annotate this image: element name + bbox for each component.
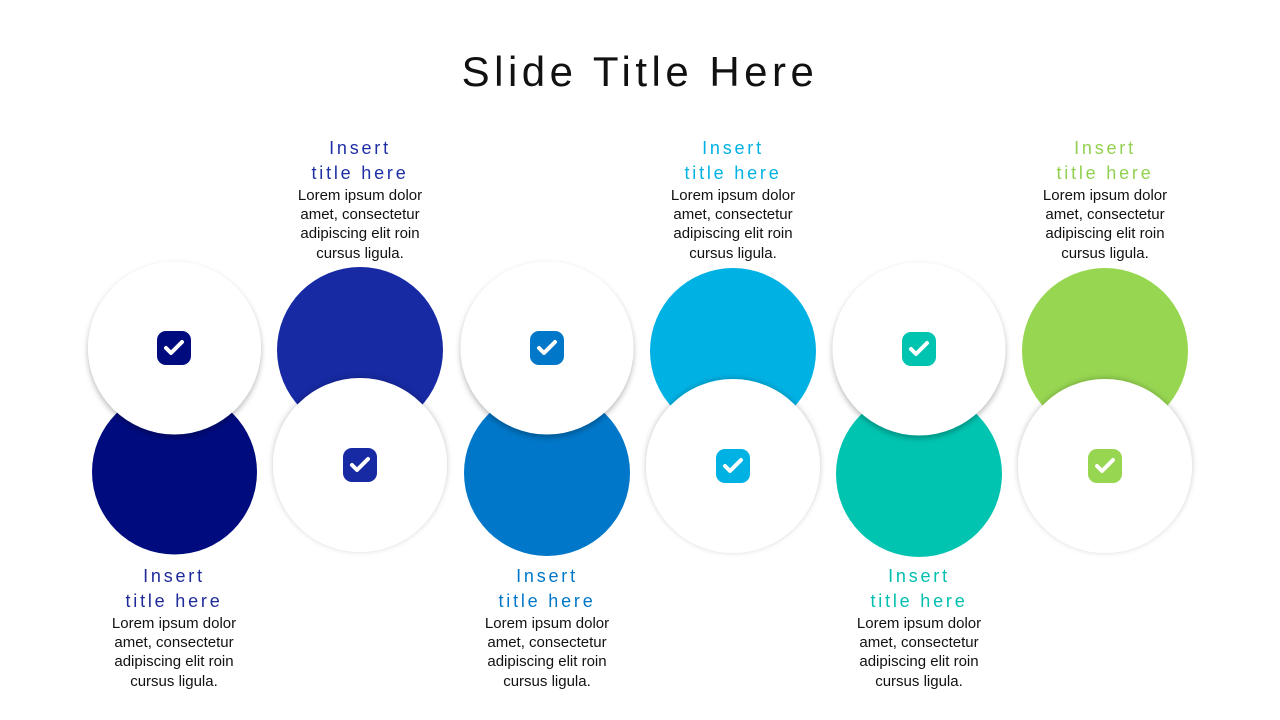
step 6: title here — [1056, 163, 1154, 183]
step 4: Insert — [702, 138, 764, 158]
step 2: Lorem ipsum dolor — [298, 187, 422, 204]
step 6: Lorem ipsum dolor — [1043, 187, 1167, 204]
step 6: adipiscing elit roin — [1045, 225, 1165, 242]
step 1: cursus ligula. — [130, 673, 218, 690]
step 3: Insert — [516, 566, 578, 586]
step 4: adipiscing elit roin — [673, 225, 793, 242]
step 1: Insert — [143, 566, 205, 586]
step 5: title here — [870, 591, 968, 611]
step 4: title here — [684, 163, 782, 183]
step 1: title here — [125, 591, 223, 611]
step 5 — [832, 262, 1006, 690]
step 4: Lorem ipsum dolor — [671, 187, 795, 204]
step 1: amet, consectetur — [114, 634, 234, 651]
step 2: title here — [311, 163, 409, 183]
step 2: cursus ligula. — [316, 245, 404, 262]
step 3: Lorem ipsum dolor — [485, 615, 609, 632]
step 5: amet, consectetur — [859, 634, 979, 651]
step 2: adipiscing elit roin — [300, 225, 420, 242]
step 4: amet, consectetur — [673, 206, 793, 223]
step 2: amet, consectetur — [300, 206, 420, 223]
step 3 — [460, 262, 634, 690]
step 5: cursus ligula. — [875, 673, 963, 690]
step 6: Insert — [1074, 138, 1136, 158]
step 1: Lorem ipsum dolor — [112, 615, 236, 632]
step 3: cursus ligula. — [503, 673, 591, 690]
step 3: amet, consectetur — [487, 634, 607, 651]
step 6: cursus ligula. — [1061, 245, 1149, 262]
step 3: adipiscing elit roin — [487, 653, 607, 670]
step 1: adipiscing elit roin — [114, 653, 234, 670]
step 4 — [646, 138, 820, 553]
step 1 — [88, 262, 261, 690]
step 5: Lorem ipsum dolor — [857, 615, 981, 632]
step 6 — [1018, 138, 1192, 553]
step 4: cursus ligula. — [689, 245, 777, 262]
step 2: Insert — [329, 138, 391, 158]
title: Slide Title Here — [462, 48, 818, 95]
step 5: Insert — [888, 566, 950, 586]
step 5: adipiscing elit roin — [859, 653, 979, 670]
step 2 — [273, 138, 447, 552]
step 6: amet, consectetur — [1045, 206, 1165, 223]
step 3: title here — [498, 591, 596, 611]
